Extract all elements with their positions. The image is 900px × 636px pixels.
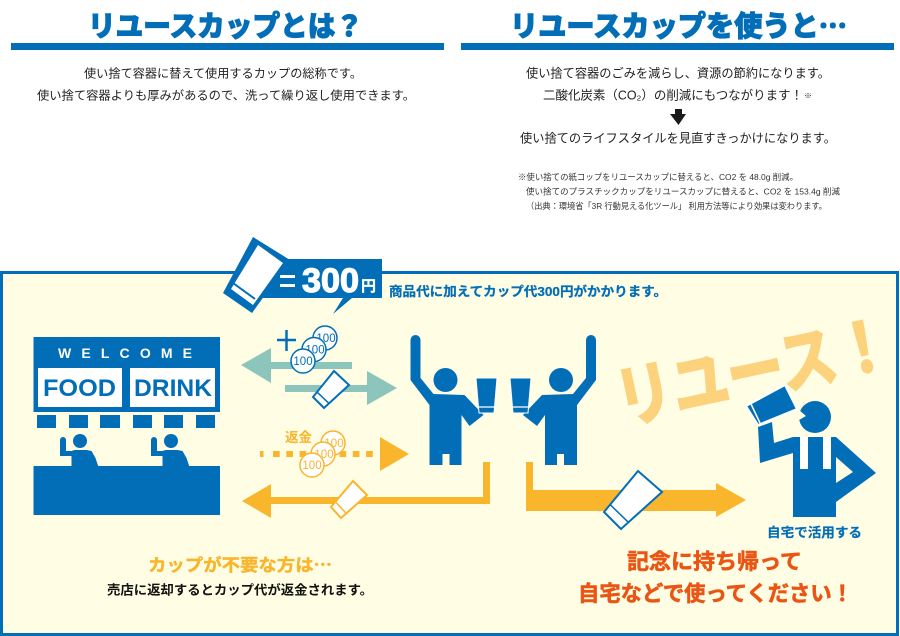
icon: orange coins: 100 (314, 449, 334, 461)
icon: blue coins: 100 (305, 344, 325, 356)
text block: benefits (520, 66, 836, 146)
arrow: take cup home (526, 462, 746, 517)
icon: food and drink stand: DRINK (134, 375, 213, 402)
heading: what is a reuse cup (11, 4, 444, 50)
text block: take home message: 自宅などで使ってください！ (578, 582, 853, 606)
callout: cup equals 300 yen: 300 (302, 262, 359, 300)
text block: return cup: 売店に返却するとカップ代が返金されます。 (107, 582, 373, 598)
text block: footnote (518, 172, 841, 211)
text block: take home message (578, 550, 853, 606)
callout: cup equals 300 yen: 円 (361, 278, 376, 295)
text block: footnote: （出典：環境省「3R 行動見える化ツール」 利用方法等により効果は変わります。 (526, 201, 827, 211)
label: refund: 返金 (285, 429, 312, 445)
icon: orange coins: 100 (302, 460, 322, 472)
panel: reuse flow background (2, 272, 898, 634)
illustration: person drinking at home (746, 385, 876, 517)
text block: return cup: カップが不要な方は… (148, 551, 332, 576)
text block: benefits: ※ (804, 92, 812, 100)
heading: what is a reuse cup: リユースカップとは？ (88, 4, 363, 45)
text block: benefits: 使い捨てのライフスタイルを見直すきっかけになります。 (520, 130, 836, 146)
arrow: teal cup to customer (285, 371, 397, 405)
icon: orange coins: 100 (324, 438, 344, 450)
icon: food and drink stand: WELCOME (58, 345, 192, 361)
text block: return cup (107, 551, 373, 598)
callout: cup equals 300 yen (223, 237, 382, 314)
text block: footnote: 使い捨てのプラスチックカップをリユースカップに替えると、CO2 を 153.4g 削減 (526, 186, 841, 196)
icon: blue coins (291, 326, 337, 373)
icon: blue coins: 100 (293, 356, 313, 368)
icon: cup being drunk from (746, 385, 797, 425)
text block: definition: 使い捨て容器に替えて使用するカップの総称です。 (84, 66, 362, 80)
icon: small blue cup (313, 371, 349, 408)
text block: benefits: 使い捨て容器のごみを減らし、資源の節約になります。 (526, 66, 830, 80)
arrow: teal payment to stand (241, 348, 352, 383)
icon: cup right (510, 378, 531, 413)
icon: food and drink stand (34, 337, 220, 515)
arrow: return cup to stand (242, 462, 490, 518)
icon: plus (277, 330, 296, 351)
text block: take home message: 記念に持ち帰って (627, 550, 802, 574)
icon: cup left (476, 378, 497, 413)
label: use at home: 自宅で活用する (767, 525, 862, 540)
caption: cup fee: 商品代に加えてカップ代300円がかかります。 (389, 284, 667, 299)
arrow: down to lifestyle (670, 109, 686, 125)
icon: staff right (151, 434, 190, 467)
text block: benefits: 二酸化炭素（CO₂）の削減にもつながります！ (543, 88, 803, 102)
icon: blue coins: 100 (316, 333, 336, 345)
text block: footnote: ※使い捨ての紙コップをリユースカップに替えると、CO2 を 48.0g 削減。 (518, 172, 798, 182)
illustration: customer right (523, 335, 596, 465)
icon: orange coins (300, 431, 345, 477)
icon: large cup on arrow (604, 471, 662, 529)
heading: using a reuse cup: リユースカップを使うと… (510, 4, 847, 45)
illustration: customer left (410, 335, 484, 465)
icon: food and drink stand: FOOD (43, 375, 116, 402)
icon: orange cup (331, 481, 367, 518)
text block: definition (37, 66, 415, 102)
icon: cup in callout (223, 237, 290, 313)
icon: staff left (60, 434, 98, 467)
arrow: dotted refund (260, 437, 409, 471)
text block: definition: 使い捨て容器よりも厚みがあるので、洗って繰り返し使用できます。 (37, 88, 415, 102)
